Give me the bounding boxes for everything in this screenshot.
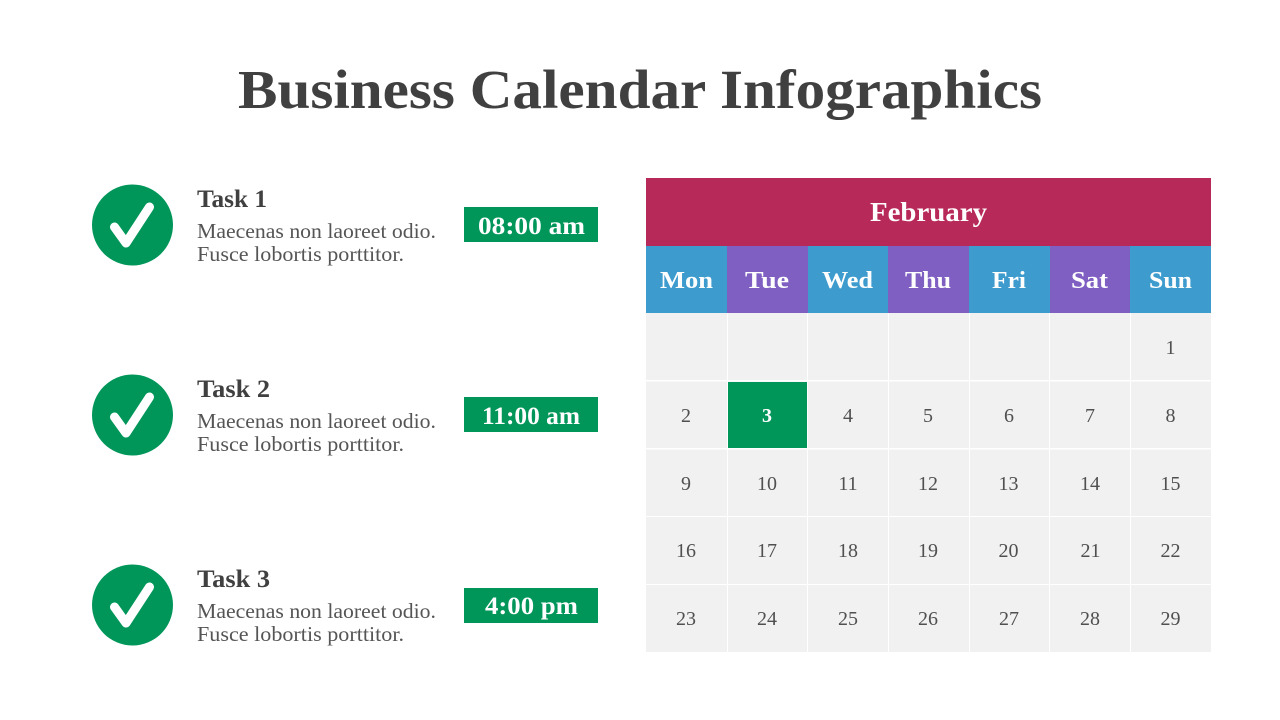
panel: calendar: [646, 178, 1211, 652]
weekday header row: Tue: [745, 268, 789, 294]
weekday header row: Wed: [822, 268, 874, 294]
task 2 description: Fusce lobortis porttitor.: [197, 432, 404, 456]
date grid: 11: [838, 473, 858, 495]
date grid: 13: [998, 473, 1018, 495]
panel: task 1: [92, 184, 598, 266]
date grid: 22: [1160, 540, 1180, 562]
date grid: 26: [918, 608, 938, 630]
icon: check circle 2: [92, 374, 173, 456]
highlighted date 3: [728, 382, 807, 448]
weekday header row: Sun: [1149, 268, 1192, 294]
task 3 heading: Task 3: [197, 566, 270, 593]
date grid: 18: [838, 540, 858, 562]
date grid: 19: [918, 540, 938, 562]
weekday header row: Fri: [992, 268, 1026, 294]
time badge 1: 08:00 am: [478, 213, 585, 240]
weekday header row: Thu: [905, 268, 951, 294]
date grid: [646, 313, 1211, 652]
icon: check circle 3: [92, 564, 173, 646]
date grid: 12: [918, 473, 938, 495]
date grid: 27: [999, 608, 1019, 630]
time badge 3: [464, 588, 598, 623]
title: Business Calendar Infographics: [238, 59, 1042, 120]
date grid: 6: [1004, 405, 1014, 427]
panel: task 3: [92, 564, 598, 646]
time badge 2: [464, 397, 598, 432]
date grid: 23: [676, 608, 696, 630]
time badge 3: 4:00 pm: [485, 593, 578, 620]
panel: task 2: [92, 374, 598, 456]
date grid: 9: [681, 473, 691, 495]
date grid: 10: [757, 473, 777, 495]
task 3 description: Fusce lobortis porttitor.: [197, 622, 404, 646]
date grid: 7: [1085, 405, 1095, 427]
date grid: 14: [1080, 473, 1100, 495]
date grid: 2: [681, 405, 691, 427]
month header: February: [870, 197, 988, 227]
weekday header row: [646, 246, 1211, 313]
weekday header row: Sat: [1071, 268, 1108, 294]
date grid: 28: [1080, 608, 1100, 630]
date grid: 8: [1166, 405, 1176, 427]
task 1 description: Maecenas non laoreet odio.: [197, 219, 436, 243]
date grid: 24: [757, 608, 777, 630]
month header: [646, 178, 1211, 246]
date grid: 25: [838, 608, 858, 630]
weekday header row: Mon: [660, 268, 713, 294]
task 1 heading: Task 1: [197, 186, 267, 213]
date grid: 16: [676, 540, 696, 562]
date grid: 1: [1166, 337, 1176, 359]
task 1 description: Fusce lobortis porttitor.: [197, 242, 404, 266]
date grid: 4: [843, 405, 853, 427]
highlighted date 3: 3: [762, 405, 772, 427]
icon: check circle 1: [92, 184, 173, 266]
date grid: 29: [1160, 608, 1180, 630]
date grid: 5: [923, 405, 933, 427]
time badge 2: 11:00 am: [482, 403, 580, 430]
date grid: 20: [998, 540, 1018, 562]
date grid: 21: [1080, 540, 1100, 562]
task 3 description: Maecenas non laoreet odio.: [197, 599, 436, 623]
date grid: 15: [1160, 473, 1180, 495]
task 2 heading: Task 2: [197, 376, 270, 403]
date grid: 17: [757, 540, 777, 562]
task 2 description: Maecenas non laoreet odio.: [197, 409, 436, 433]
time badge 1: [464, 207, 598, 242]
